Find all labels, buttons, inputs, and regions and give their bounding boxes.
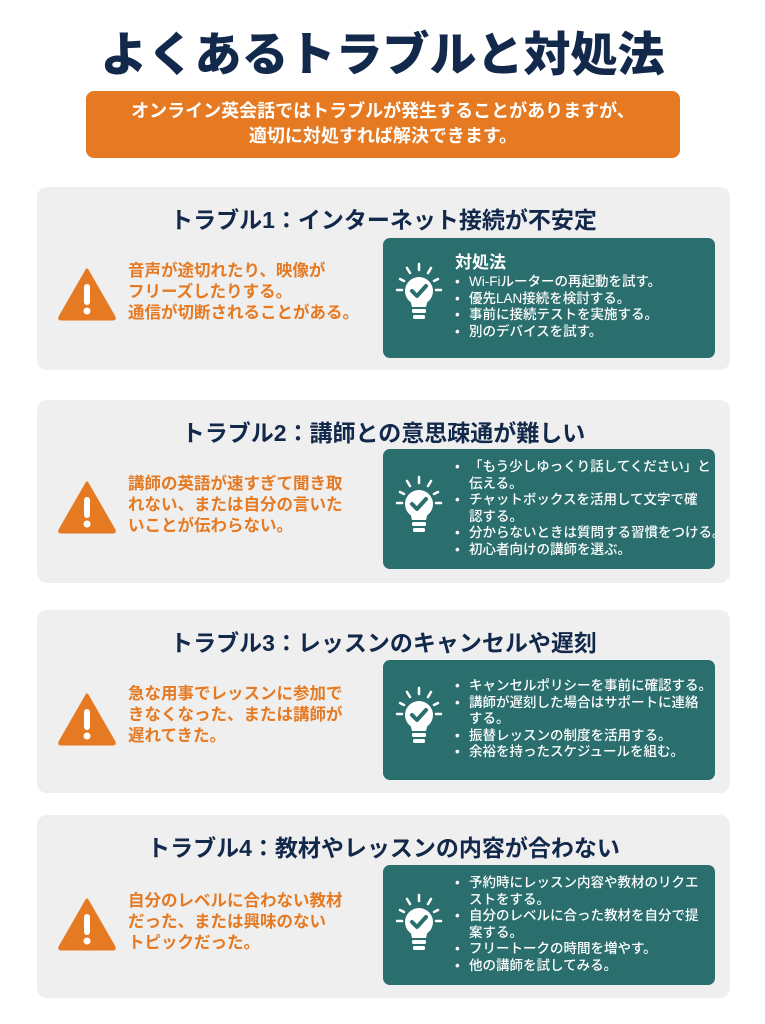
solution list 2: 分からないときは質問する習慣をつける。: [469, 525, 726, 540]
solution list 2: チャットボックスを活用して文字で確: [469, 492, 698, 507]
solution list 3: キャンセルポリシーを事前に確認する。: [469, 678, 712, 693]
solution list 3: 余裕を持ったスケジュールを組む。: [469, 744, 684, 759]
icon: bulb: [396, 476, 442, 532]
banner: intro: オンライン英会話ではトラブルが発生することがありますが、: [131, 101, 635, 121]
panel: trouble 1: [37, 187, 730, 370]
heading 3: トラブル3：レッスンのキャンセルや遅刻: [170, 630, 597, 656]
icon: warning: [58, 268, 116, 320]
solution list 1: 事前に接続テストを実施する。: [469, 307, 658, 322]
solution list 1: 別のデバイスを試す。: [469, 324, 602, 338]
solution list 3: 振替レッスンの制度を活用する。: [469, 728, 672, 742]
solution list 2: 伝える。: [469, 476, 523, 490]
solution list 1: 優先LAN接続を検討する。: [469, 290, 630, 306]
icon: bulb: [396, 262, 442, 319]
solution list 4: フリートークの時間を増やす。: [469, 941, 657, 956]
problem text 1: フリーズしたりする。: [128, 283, 292, 301]
solution list 3: する。: [469, 711, 510, 726]
solution box 3: [383, 660, 715, 780]
title: よくあるトラブルと対処法: [100, 28, 664, 81]
solution list 3: 講師が遅刻した場合はサポートに連絡: [469, 694, 698, 710]
problem text 3: [128, 684, 342, 745]
icon: bulb: [396, 894, 442, 950]
problem text 2: いことが伝わらない。: [128, 517, 293, 535]
icon: warning: [58, 481, 116, 534]
solution list 1: Wi-Fiルーターの再起動を試す。: [469, 274, 661, 289]
solution list 2: 認する。: [469, 508, 523, 524]
panel: trouble 4: [37, 815, 730, 998]
problem text 4: 自分のレベルに合わない教材: [128, 892, 342, 910]
solution list 4: [456, 875, 698, 972]
solution list 2: [456, 459, 726, 556]
problem text 1: 音声が途切れたり、映像が: [128, 262, 325, 280]
problem text 1: 通信が切断されることがある。: [128, 304, 359, 322]
banner: intro: [86, 91, 680, 158]
problem text 4: トピックだった。: [128, 934, 260, 952]
solution list 2: 初心者向けの講師を選ぶ。: [469, 542, 631, 556]
heading 4: トラブル4：教材やレッスンの内容が合わない: [147, 835, 620, 861]
solution list 3: [456, 678, 712, 759]
solution box 4: [383, 865, 715, 985]
solution list 4: 他の講師を試してみる。: [469, 958, 617, 972]
icon: bulb: [396, 686, 442, 743]
problem text 3: きなくなった、または講師が: [128, 706, 342, 724]
heading 1: トラブル1：インターネット接続が不安定: [170, 207, 597, 233]
icon: warning: [58, 898, 116, 950]
solution list 4: 自分のレベルに合った教材を自分で提: [469, 908, 698, 923]
solution heading: 対処法: [455, 253, 506, 272]
problem text 2: 講師の英語が速すぎて聞き取: [128, 475, 342, 493]
problem text 3: 遅れてきた。: [128, 727, 226, 745]
problem text 4: だった、または興味のない: [128, 913, 326, 931]
problem text 3: 急な用事でレッスンに参加で: [128, 685, 342, 703]
problem text 2: れない、または自分の言いた: [128, 496, 342, 514]
problem text 4: [128, 892, 342, 952]
solution box 1: [383, 238, 715, 358]
problem text 2: [128, 474, 342, 535]
heading 2: トラブル2：講師との意思疎通が難しい: [182, 420, 585, 446]
icon: warning: [58, 693, 116, 746]
solution list 1: [456, 274, 661, 338]
problem text 1: [128, 262, 359, 322]
panel: trouble 2: [37, 400, 730, 583]
banner: intro: 適切に対処すれば解決できます。: [249, 126, 517, 146]
solution list 4: 案する。: [469, 924, 523, 940]
solution list 4: ストをする。: [469, 892, 550, 906]
solution list 2: 「もう少しゆっくり話してください」と: [469, 459, 711, 474]
solution list 4: 予約時にレッスン内容や教材のリクエ: [469, 875, 698, 890]
panel: trouble 3: [37, 610, 730, 793]
solution box 2: [383, 449, 715, 569]
